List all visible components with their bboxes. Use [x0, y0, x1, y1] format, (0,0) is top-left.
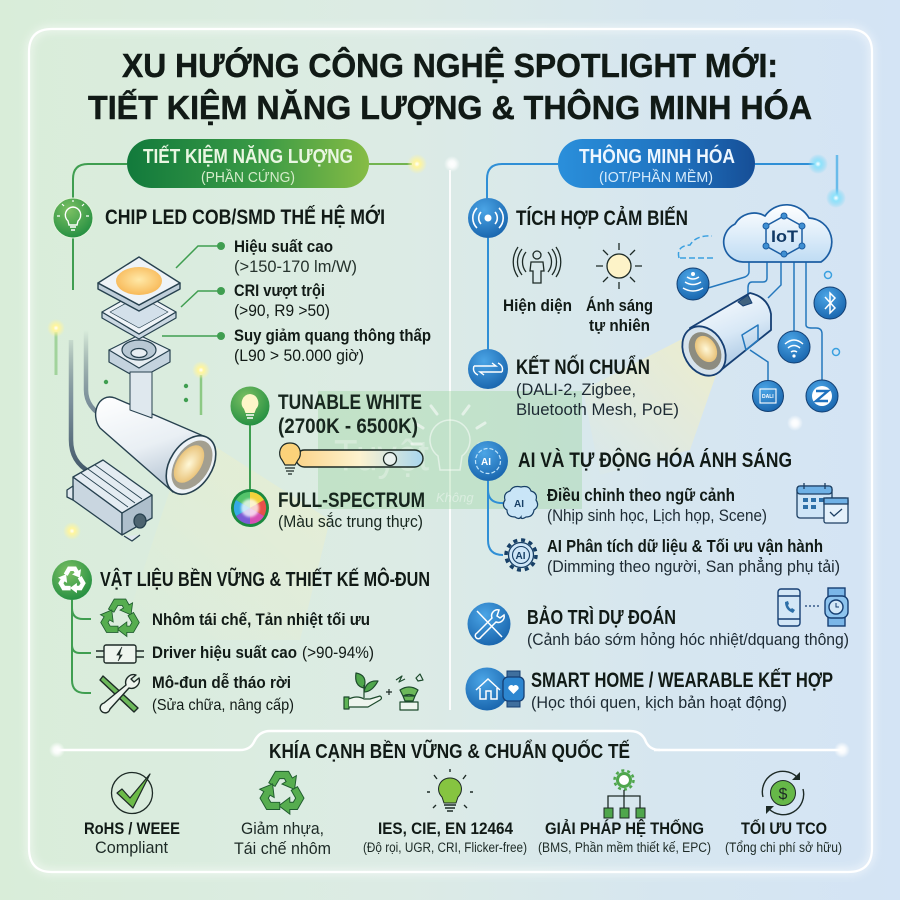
text: chip features: (>90, R9 >50) — [234, 301, 330, 320]
text: analytics: AI Phân tích dữ liệu & Tối ưu vận hành — [547, 536, 823, 556]
icon: phone and watch — [778, 588, 848, 626]
text: sensor labels — [503, 296, 653, 335]
column: recycle: Giảm nhựa, — [241, 819, 324, 838]
icon: calendar — [797, 483, 848, 523]
light beam: right spotlight — [583, 337, 716, 475]
icon: AI brain: AI — [481, 457, 491, 468]
panel: predictive maintenance — [468, 588, 849, 649]
icon: plant and lamp — [344, 673, 423, 710]
cloud — [724, 205, 832, 262]
tube — [96, 397, 208, 492]
text: analytics: (Dimming theo người, San phẳng phụ tải) — [547, 557, 840, 576]
text: full spectrum: (Màu sắc trung thực) — [278, 512, 423, 531]
icon: sensor signal — [468, 198, 508, 238]
panel: tiết kiệm năng lượng header — [73, 139, 427, 200]
text: analytics — [547, 536, 840, 576]
hexagon iot: IoT — [771, 227, 799, 246]
optic ring — [102, 291, 176, 339]
title: TIẾT KIỆM NĂNG LƯỢNG & THÔNG MINH HÓA — [88, 88, 812, 126]
column: recycle: Tái chế nhôm — [234, 839, 331, 858]
watermark: Tuyệt — [334, 431, 429, 480]
icon: AI gear — [506, 540, 536, 570]
heading: materials: VẬT LIỆU BỀN VỮNG & THIẾT KẾ MÔ-ĐUN — [100, 567, 430, 591]
text: driver: Driver hiệu suất cao — [152, 643, 297, 662]
icon: tools — [100, 675, 139, 713]
text: chip features: CRI vượt trội — [234, 281, 325, 300]
text: context — [547, 485, 767, 525]
heading: chip LED: CHIP LED COB/SMD THẾ HỆ MỚI — [105, 205, 385, 229]
text: maintenance: BẢO TRÌ DỰ ĐOÁN — [527, 606, 676, 629]
column: RoHS: RoHS / WEEE — [84, 819, 180, 838]
text: tunable white: (2700K - 6500K) — [278, 415, 418, 438]
panel: sustainable materials — [52, 560, 430, 714]
icon: connection — [468, 349, 508, 389]
panel: smart home: (Học thói quen, kịch bản hoạt động) — [531, 693, 787, 712]
nodes — [677, 268, 846, 431]
chip callouts — [162, 242, 225, 340]
panel: standards — [84, 739, 842, 858]
panel: tiết kiệm năng lượng header: (PHẦN CỨNG) — [201, 169, 295, 186]
heading: standards: KHÍA CẠNH BỀN VỮNG & CHUẨN QUỐC TẾ — [269, 739, 630, 763]
icon: bulb in green circle — [53, 198, 93, 238]
column: standards bulb: (Độ rọi, UGR, CRI, Flicker-free) — [363, 840, 527, 855]
text: chip features: Hiệu suất cao — [234, 237, 333, 256]
decorative glow dots left — [47, 319, 210, 540]
tunable slider — [280, 443, 423, 474]
heading: AI: AI VÀ TỰ ĐỘNG HÓA ÁNH SÁNG — [518, 448, 792, 472]
stem — [130, 372, 152, 418]
heatsink base — [109, 335, 170, 379]
text: full spectrum — [278, 489, 425, 531]
icon: driver — [96, 645, 144, 663]
text: chip features — [234, 237, 431, 365]
text: module: Mô-đun dễ tháo rời — [152, 673, 291, 692]
text: context: Điều chỉnh theo ngữ cảnh — [547, 485, 735, 505]
icon: tunable white — [230, 386, 270, 426]
light beam: left spotlight — [120, 440, 330, 640]
text: sensor labels: Hiện diện — [503, 296, 572, 315]
icon: recycle in circle — [52, 560, 92, 600]
illustration: exploded spotlight — [67, 257, 226, 541]
icon: small brain: AI — [514, 499, 524, 510]
title: XU HƯỚNG CÔNG NGHỆ SPOTLIGHT MỚI: — [122, 46, 778, 84]
right timeline line — [487, 238, 489, 350]
panel: thông minh hóa header: (IOT/PHẦN MỀM) — [599, 169, 713, 186]
column: standards bulb: IES, CIE, EN 12464 — [378, 819, 513, 838]
column: TCO: $ — [778, 786, 788, 803]
column: TCO: TỐI ƯU TCO — [741, 818, 827, 838]
column: RoHS: Compliant — [95, 838, 168, 857]
text: connection: (DALI-2, Zigbee, — [516, 380, 636, 399]
text: sensor labels: Ánh sáng — [586, 296, 653, 315]
title — [88, 46, 812, 126]
icon: full spectrum colour wheel — [231, 489, 269, 527]
text: tunable white — [278, 391, 422, 438]
center divider — [444, 156, 460, 710]
panel: tiết kiệm năng lượng header: TIẾT KIỆM NĂNG LƯỢNG — [143, 144, 353, 168]
right spotlight — [674, 293, 771, 384]
text: chip features: Suy giảm quang thông thấp — [234, 326, 431, 345]
driver box — [67, 460, 152, 541]
icon: recycle — [97, 599, 142, 638]
column: TCO: (Tổng chi phí sở hữu) — [725, 840, 842, 855]
column: recycle — [234, 771, 331, 858]
nodes: DALI — [762, 394, 774, 400]
text: connection: Bluetooth Mesh, PoE) — [516, 400, 679, 419]
text: chip features: (L90 > 50.000 giờ) — [234, 346, 364, 365]
panel: thông minh hóa header: THÔNG MINH HÓA — [579, 144, 735, 168]
illustration: iot cloud network — [674, 205, 846, 431]
watermark: Không — [436, 490, 474, 505]
text: sensor labels: tự nhiên — [589, 316, 650, 335]
icon: tools blue — [468, 602, 510, 646]
text: tunable white: TUNABLE WHITE — [278, 391, 422, 414]
chip — [98, 257, 180, 311]
panel: smart home — [466, 668, 833, 712]
text: connection: KẾT NỐI CHUẨN — [516, 355, 650, 379]
column: TCO — [725, 771, 842, 855]
icon: presence — [513, 247, 561, 283]
text: module — [152, 673, 294, 714]
text: recycled aluminium: Nhôm tái chế, Tản nhiệt tối ưu — [152, 610, 370, 629]
text: chip features: (>150-170 lm/W) — [234, 257, 357, 276]
icon: daylight sun — [596, 243, 642, 289]
connector: tunable to full spectrum — [249, 425, 251, 490]
column: standards bulb — [363, 769, 527, 855]
icon: small brain — [503, 486, 538, 518]
column: RoHS — [84, 772, 180, 857]
left timeline line — [72, 238, 74, 290]
icon: home and watch — [466, 668, 524, 710]
text: module: (Sửa chữa, nâng cấp) — [152, 697, 294, 714]
text: connection — [516, 355, 679, 419]
icon: AI brain — [468, 441, 508, 481]
watermark — [318, 391, 582, 509]
dashed cloud — [678, 236, 716, 258]
hexagon iot — [763, 213, 805, 257]
text: driver: (>90-94%) — [302, 643, 374, 662]
panel: AI — [468, 441, 848, 576]
column: system: (BMS, Phần mềm thiết kế, EPC) — [538, 840, 711, 855]
heading: sensors: TÍCH HỢP CẢM BIẾN — [516, 207, 688, 230]
cables — [71, 330, 106, 472]
text: context: (Nhịp sinh học, Lịch họp, Scene) — [547, 506, 767, 525]
panel: thông minh hóa header — [487, 139, 846, 208]
text: full spectrum: FULL-SPECTRUM — [278, 489, 425, 512]
icon: AI gear: AI — [516, 551, 526, 562]
column: system — [538, 770, 711, 855]
network lines — [708, 262, 822, 380]
panel: predictive maintenance: (Cảnh báo sớm hỏng hóc nhiệt/dquang thông) — [527, 630, 849, 649]
column: system: GIẢI PHÁP HỆ THỐNG — [545, 818, 704, 838]
